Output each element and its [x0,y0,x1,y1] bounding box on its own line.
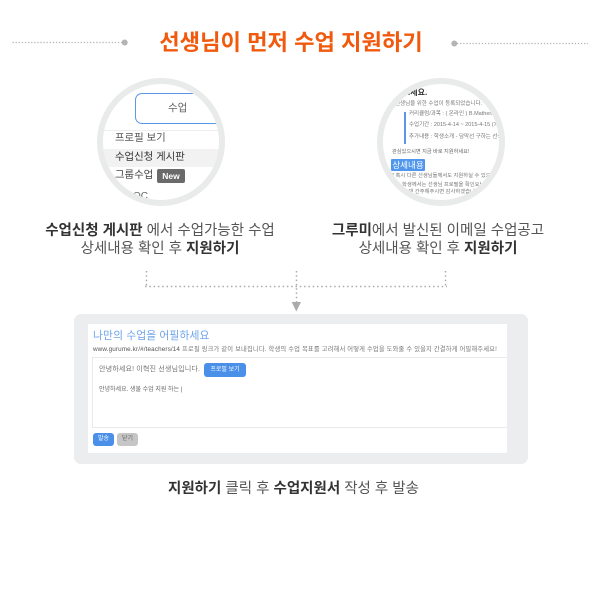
quote line 1: 커리큘럼/과목 : ( 온라인 ) B.Mathematics [409,111,505,117]
title: 선생님이 먼저 수업 지원하기 [159,30,423,55]
left title ornament [12,40,588,46]
bottom caption: 지원하기 클릭 후 수업지원서 작성 후 발송 [168,481,419,497]
quote line 3: 추가내용 : 학생소개 - 담막선 구하는 선생님 [409,134,505,140]
left caption: 상세내용 확인 후 지원하기 [81,241,239,257]
greeting: 안녕하세요! 이혁진 선생님입니다. [99,365,200,373]
profile button [204,363,246,377]
send button [93,433,114,446]
prompt text: 관심있으시면 지금 바로 지원하세요! [392,149,469,155]
form heading: 나만의 수업을 어필하세요 [93,330,210,342]
right caption: 상세내용 확인 후 지원하기 [359,241,517,257]
right caption [332,222,544,257]
close button: 닫기 [122,436,133,442]
right caption: 그루미에서 발신된 이메일 수업공고 [332,223,544,239]
profile button: 프로필 보기 [210,367,240,373]
menu item: board highlighted [103,149,219,167]
menu item: profile: 프로필 보기 [115,133,166,144]
form description: www.gurume.kr/#/teachers/14 프로필 링크가 같이 보내집니다. 학생의 수업 목표를 고려해서 어떻게 수업을 도와줄 수 있을지 간결하게 어필해주세요! [93,346,497,353]
left caption [45,222,275,257]
note line 2: 학생께서는 선생님 프로필을 확인요남버 [402,182,489,188]
new badge [157,169,185,183]
note line 3: * 댓 간주해주시면 감사하겠습니다 [405,189,480,195]
menu item: board highlighted: 수업신청 게시판 [115,152,185,163]
white form [88,324,507,453]
right circle: email screenshot [377,78,505,206]
email heading: .세요. [408,88,427,97]
left caption: 수업신청 게시판 에서 수업가능한 수업 [45,223,275,239]
selected tab [135,93,225,124]
textarea [92,357,507,428]
note line 1: * 혹시 다른 선생님들께서도 지원하실 수 있으시기 [392,173,500,179]
menu item: cut off: OC [133,191,148,202]
details button: 상세내용 [392,160,424,170]
message: 안녕하세요. 생물 수업 지원 하는 | [99,387,182,393]
email intro: 선생님을 위한 수업이 등록되었습니다. [395,101,482,107]
divider [103,130,219,131]
menu item: group class: 그룹수업 [115,170,153,181]
left circle: menu screenshot [97,78,225,206]
panel: application form [74,314,528,464]
close button [117,433,138,446]
tab label: 수업 [168,102,187,114]
send button: 발송 [98,436,109,442]
new badge: New [162,171,180,181]
quote bar [404,112,406,144]
connector arrow [145,271,447,312]
